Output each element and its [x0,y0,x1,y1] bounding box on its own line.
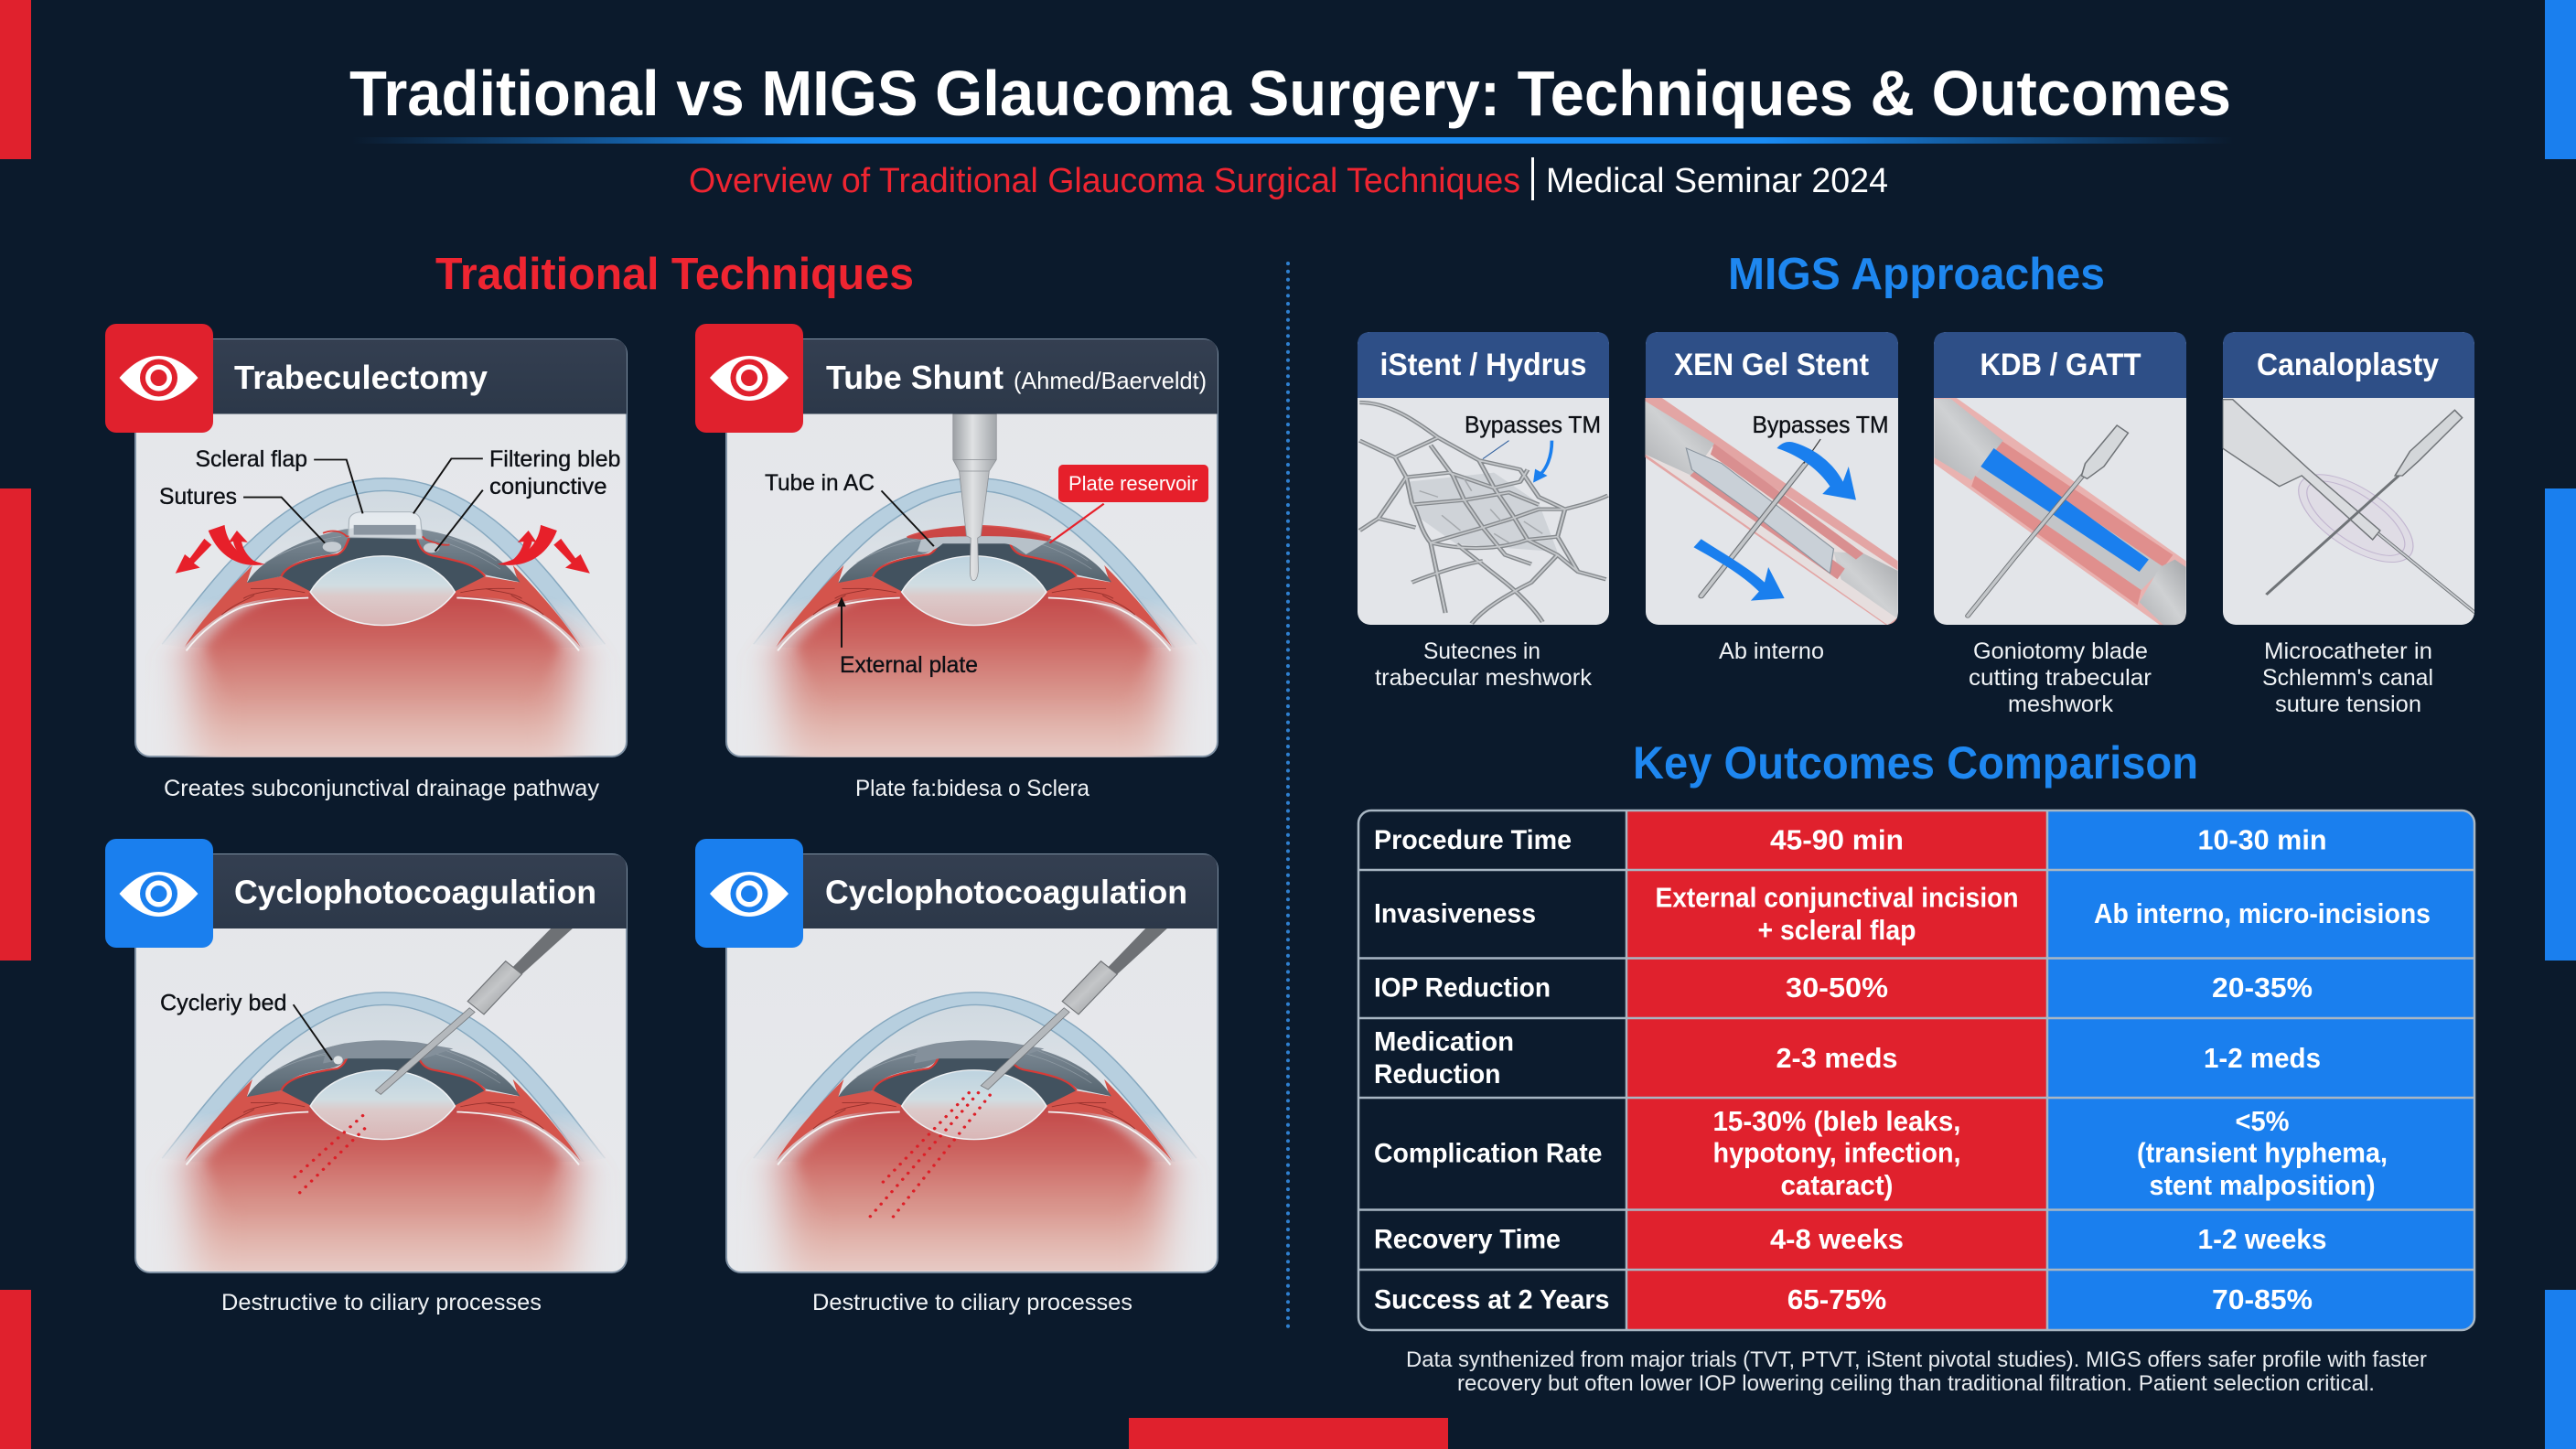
callout labels [159,446,620,510]
caption: Destructive to ciliary processes [221,1290,542,1315]
caption: cutting trabecular [1969,665,2152,691]
tube insertion instrument and callout lines [837,413,1104,648]
card title: iStent / Hydrus [1379,348,1586,382]
eye cross-section illustration [754,993,1197,1299]
decorative right blue bars [2545,0,2576,1449]
card header [135,339,627,413]
row labels: Procedure Time [1374,825,1572,855]
traditional values: 65-75% [1787,1283,1886,1315]
card header [1934,332,2186,398]
stent illustration [1645,398,1898,625]
MIGS values: 10-30 min [2197,823,2327,856]
card title: Canaloplasty [2257,348,2439,382]
caption: Destructive to ciliary processes [812,1290,1132,1315]
caption: Sutecnes in [1423,639,1540,664]
traditional values: + scleral flap [1758,914,1916,946]
card body [135,339,627,757]
footnote: Data synthenized from major trials (TVT, PTVT, iStent pivotal studies). MIGS offers safer profile with faster [1406,1347,2427,1372]
table grid [1358,810,2474,1330]
panel: XEN gel stent [1645,332,1898,664]
traditional values: 30-50% [1786,971,1888,1004]
eye cross-section illustration [754,478,1197,785]
traditional values: External conjunctival incision [1656,882,2018,913]
caption: Ab interno [1719,639,1824,664]
caption: trabecular meshwork [1375,665,1593,691]
MIGS values: stent malposition) [2150,1169,2375,1201]
MIGS values: <5% [2236,1105,2289,1137]
card title: Trabeculectomy [234,359,488,396]
card body [1934,332,2186,625]
footnote [1406,1347,2427,1396]
card title: (Ahmed/Baerveldt) [1014,367,1207,394]
traditional values: cataract) [1780,1169,1894,1201]
caption: Goniotomy blade [1973,639,2148,664]
card title: XEN Gel Stent [1674,348,1869,382]
caption [2262,639,2433,717]
MIGS values: 1-2 meds [2204,1042,2321,1074]
MIGS values: 70-85% [2212,1283,2313,1315]
footnote: recovery but often lower IOP lowering ceiling than traditional filtration. Patient selection critical. [1457,1371,2375,1396]
row labels [1374,825,1610,1315]
caption: Creates subconjunctival drainage pathway [164,776,599,801]
decorative left red bars [0,0,31,1449]
card body [1646,332,1898,625]
card body [1358,332,1609,625]
label: tube in AC: Tube in AC [765,470,875,496]
heading: key outcomes: Key Outcomes Comparison [1633,737,2198,789]
caption [1375,639,1593,691]
traditional values: 45-90 min [1770,823,1904,856]
label: cyclery bed: Cycleriy bed [160,990,287,1015]
label: Bypasses TM [1465,411,1601,438]
card body [726,854,1218,1272]
row labels: Invasiveness [1374,898,1536,929]
row labels: Reduction [1374,1059,1500,1089]
callout labels: conjunctive [489,474,607,499]
mesh illustration [1359,402,1608,624]
icon: eye [105,324,213,433]
decorative bottom red bar [1129,1418,1448,1449]
MIGS values: Ab interno, micro-incisions [2094,897,2431,929]
card header [2223,332,2474,398]
card body [135,854,627,1272]
MIGS values: (transient hyphema, [2137,1136,2388,1169]
heading: MIGS approaches: MIGS Approaches [1728,250,2105,299]
panel: canaloplasty [2223,332,2477,717]
row labels: Success at 2 Years [1374,1284,1610,1315]
subtitle [689,157,1888,200]
comparison table [1358,810,2474,1330]
title underline [352,137,2234,144]
MIGS values: 1-2 weeks [2197,1223,2327,1255]
column: MIGS [2047,810,2474,1330]
panel: cyclophotocoagulation right [695,839,1218,1315]
column divider [1286,263,1290,1328]
caption: Schlemm's canal [2262,665,2433,691]
MIGS values [2094,823,2431,1315]
row labels: Medication [1374,1026,1514,1057]
traditional values: 4-8 weeks [1770,1223,1904,1255]
goniotomy blade illustration [1934,398,2186,625]
subtitle: Overview of Traditional Glaucoma Surgical Techniques [689,162,1520,200]
eye cross-section illustration [162,993,605,1299]
card body [2223,332,2474,625]
panel: tube shunt [695,324,1218,801]
caption: Microcatheter in [2264,639,2432,664]
card title: Cyclophotocoagulation [825,873,1187,911]
traditional values: hypotony, infection, [1712,1136,1961,1169]
panel: iStent / Hydrus [1358,332,1609,691]
row labels: Complication Rate [1374,1138,1603,1169]
callout: plate reservoir: Plate reservoir [1068,472,1198,495]
label: Bypasses TM [1753,411,1888,438]
card title: Tube Shunt [826,359,1004,396]
callout labels: Scleral flap [196,446,307,472]
caption [1969,639,2152,717]
panel: cyclophotocoagulation left [105,839,627,1315]
card header [1646,332,1898,398]
icon: eye [695,324,803,433]
panel: KDB / GATT [1934,332,2186,717]
traditional values [1656,823,2018,1315]
column: labels [1358,810,1626,1330]
card header [1358,332,1609,398]
card body [726,339,1218,757]
eye cross-section illustration [162,458,605,785]
card header [726,854,1218,928]
card header [135,854,627,928]
caption: suture tension [2275,692,2421,717]
card header [726,339,1218,413]
caption: meshwork [2008,692,2113,717]
card title: KDB / GATT [1980,348,2141,382]
title: Traditional vs MIGS Glaucoma Surgery: Techniques & Outcomes [349,58,2231,129]
icon: eye [105,839,213,948]
caption: Plate fa:bidesa o Sclera [855,776,1089,801]
subtitle: Medical Seminar 2024 [1546,162,1888,200]
traditional values: 2-3 meds [1776,1042,1897,1074]
MIGS values: 20-35% [2212,971,2313,1004]
row labels: Recovery Time [1374,1224,1561,1255]
card title [826,359,1207,396]
label: external plate: External plate [840,652,978,678]
callout labels: Sutures [159,484,237,510]
row labels: IOP Reduction [1374,973,1551,1003]
heading: traditional techniques: Traditional Techniques [435,250,914,299]
column: traditional [1626,810,2047,1330]
panel: trabeculectomy [105,324,627,801]
card title: Cyclophotocoagulation [234,873,596,911]
callout labels: Filtering bleb [489,446,620,472]
microcatheter illustration [2223,400,2477,615]
traditional values: 15-30% (bleb leaks, [1712,1105,1961,1137]
probe and treatment spots [870,928,1167,1220]
icon: eye [695,839,803,948]
probe, treatment spots and callout line [294,928,573,1198]
callout: plate reservoir [1058,465,1208,502]
